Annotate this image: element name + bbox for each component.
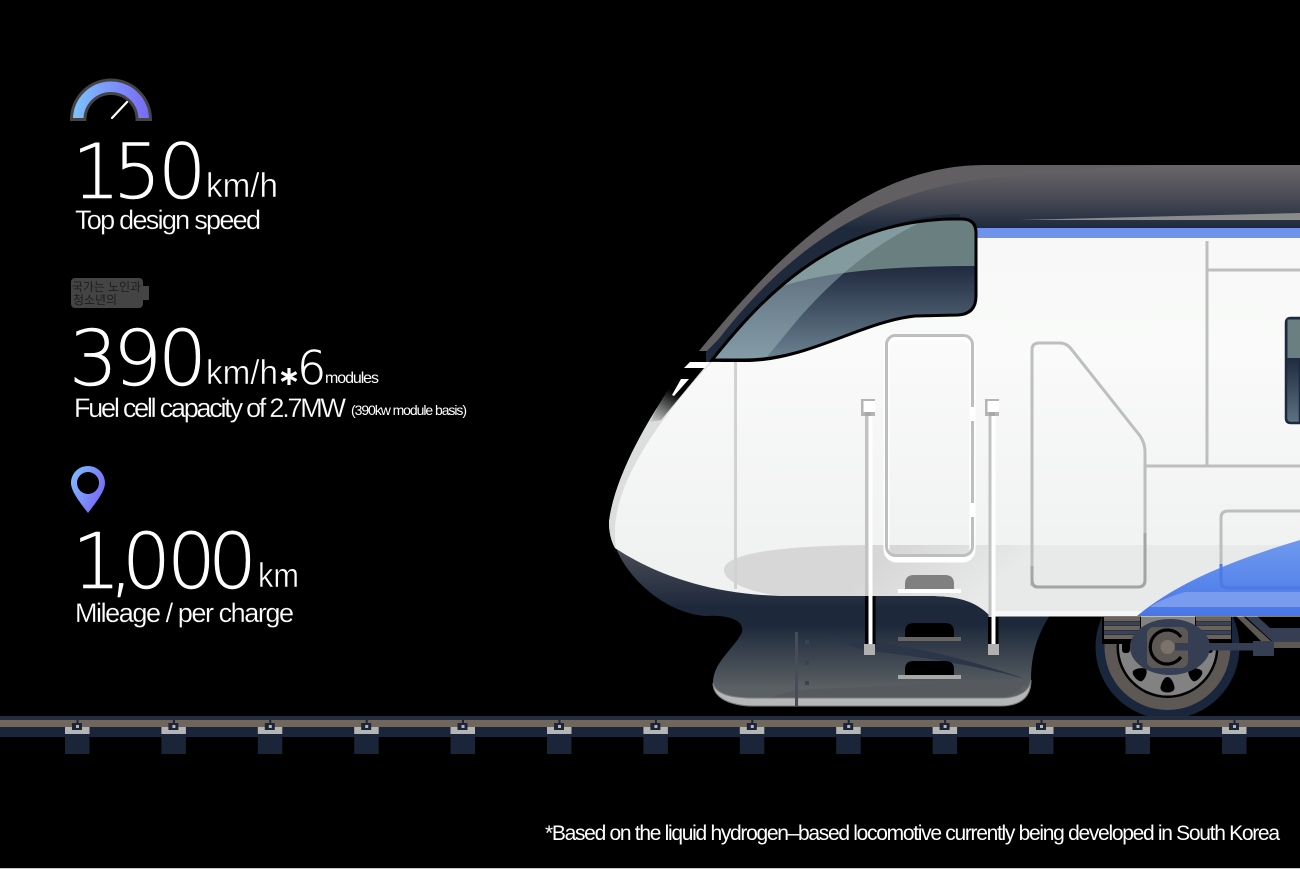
battery icon with label [71, 278, 149, 308]
railway track [0, 716, 1300, 754]
stat: top design speed: 150 [72, 127, 206, 216]
stat: fuel cell capacity: Fuel cell capacity of 2.7MW [74, 393, 347, 423]
battery icon with label: 국가는 노인과 [72, 280, 141, 294]
wheel holes [1122, 640, 1213, 692]
stat: top design speed: km/h [206, 167, 278, 205]
stat: mileage: Mileage / per charge [75, 598, 294, 628]
stat: fuel cell capacity: (390kw module basis) [351, 402, 467, 418]
stat: mileage: km [258, 557, 299, 595]
stat: fuel cell capacity: 6 [297, 341, 326, 395]
headlight slot [650, 362, 710, 422]
door tabs [971, 407, 975, 517]
train [609, 165, 1300, 719]
wheel and bogie [1096, 616, 1300, 716]
grab handle left [861, 399, 876, 655]
stat: top design speed: Top design speed [75, 205, 261, 235]
skirt lower sweep [770, 678, 1028, 698]
stat: mileage [72, 518, 299, 628]
springs [1102, 616, 1232, 644]
stat: fuel cell capacity: modules [325, 370, 379, 387]
grab handle right [985, 399, 999, 655]
gauge icon [72, 80, 150, 120]
skirt seam and rivets [795, 632, 809, 706]
stat: fuel cell capacity: km/h [206, 354, 278, 392]
stat: fuel cell capacity: 390 [69, 315, 207, 404]
lower body shade [724, 545, 1300, 616]
skirt base strip [713, 680, 1031, 706]
battery icon with label: 청소년의 [73, 293, 117, 307]
stat: mileage: 1,000 [72, 518, 257, 607]
stat: fuel cell capacity [69, 315, 467, 423]
stat: top design speed [72, 127, 278, 235]
sleepers [65, 720, 1246, 754]
door [886, 336, 972, 560]
location pin icon [71, 466, 105, 513]
footnote: *Based on the liquid hydrogen–based locomotive currently being developed in South Korea [545, 822, 1280, 845]
cab windshield [709, 218, 978, 362]
roof [699, 165, 1300, 351]
roof silver streak [1019, 213, 1300, 220]
white body shell [609, 238, 1300, 616]
side window [1286, 318, 1300, 423]
nose edge highlight [609, 362, 712, 549]
underbody skirt [613, 540, 1052, 706]
panel lines [736, 241, 1300, 589]
door step [898, 575, 961, 593]
blue roof stripe [970, 228, 1300, 238]
lower steps [898, 623, 961, 679]
blue lower swoop [1137, 540, 1300, 616]
